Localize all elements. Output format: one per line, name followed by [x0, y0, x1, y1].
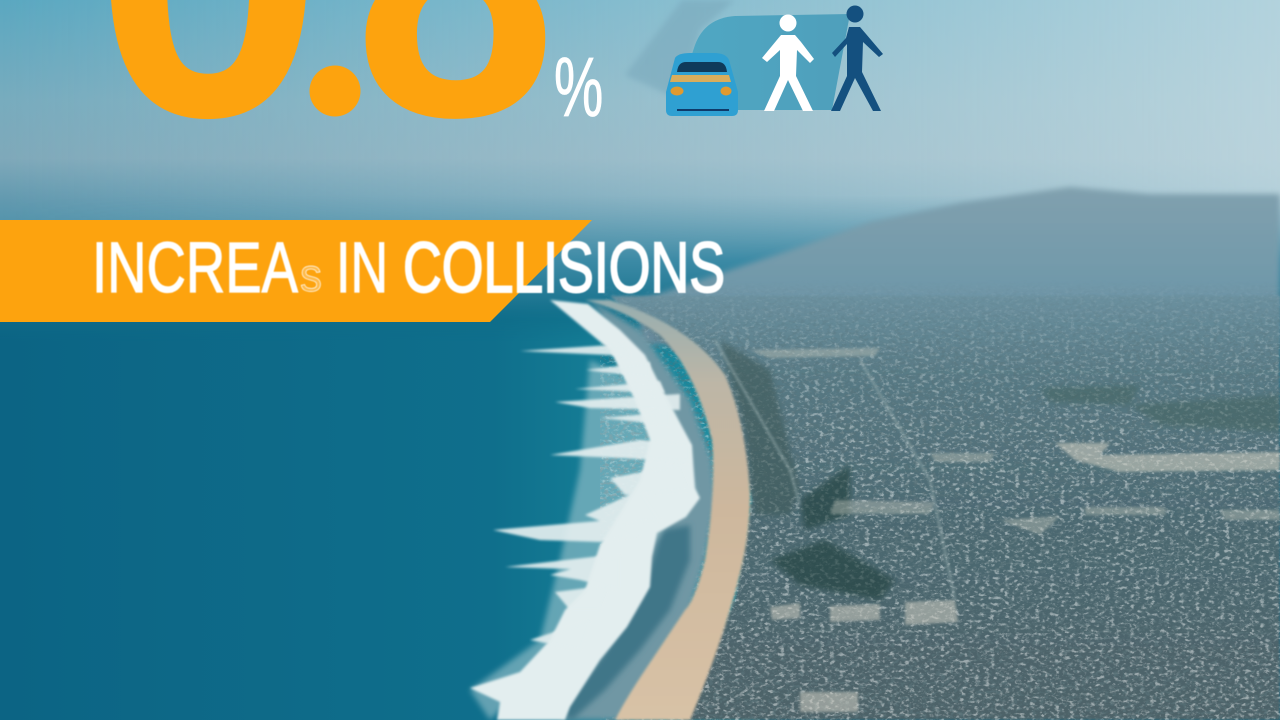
big statistic 0.8: [94, 0, 556, 205]
pale lots: [1055, 443, 1280, 472]
percent sign: %: [554, 42, 603, 135]
icon shadow wedge: [625, 0, 735, 100]
icon: dark blue pedestrian: [831, 6, 883, 111]
surf foam and waves: [470, 300, 700, 720]
banner heading: COLLISIONS: [403, 229, 725, 308]
icon: crossing backdrop: [690, 14, 850, 110]
soft foam spray: [470, 360, 695, 720]
wave streaks: [493, 344, 690, 650]
sand beach: [585, 300, 750, 720]
icon: white pedestrian: [762, 14, 814, 111]
coastal city: [600, 280, 1280, 720]
roads: [715, 340, 955, 600]
green belt: [720, 340, 800, 515]
big statistic 0.8: .: [322, 56, 339, 123]
shallow water band: [560, 300, 716, 720]
banner heading: IN: [336, 229, 388, 308]
orange banner: [0, 220, 592, 322]
distant hills: [640, 187, 1280, 345]
banner heading: [92, 229, 725, 308]
icon: car: [666, 53, 738, 116]
banner heading: INCREA: [92, 229, 298, 308]
banner heading: s: [300, 249, 322, 301]
